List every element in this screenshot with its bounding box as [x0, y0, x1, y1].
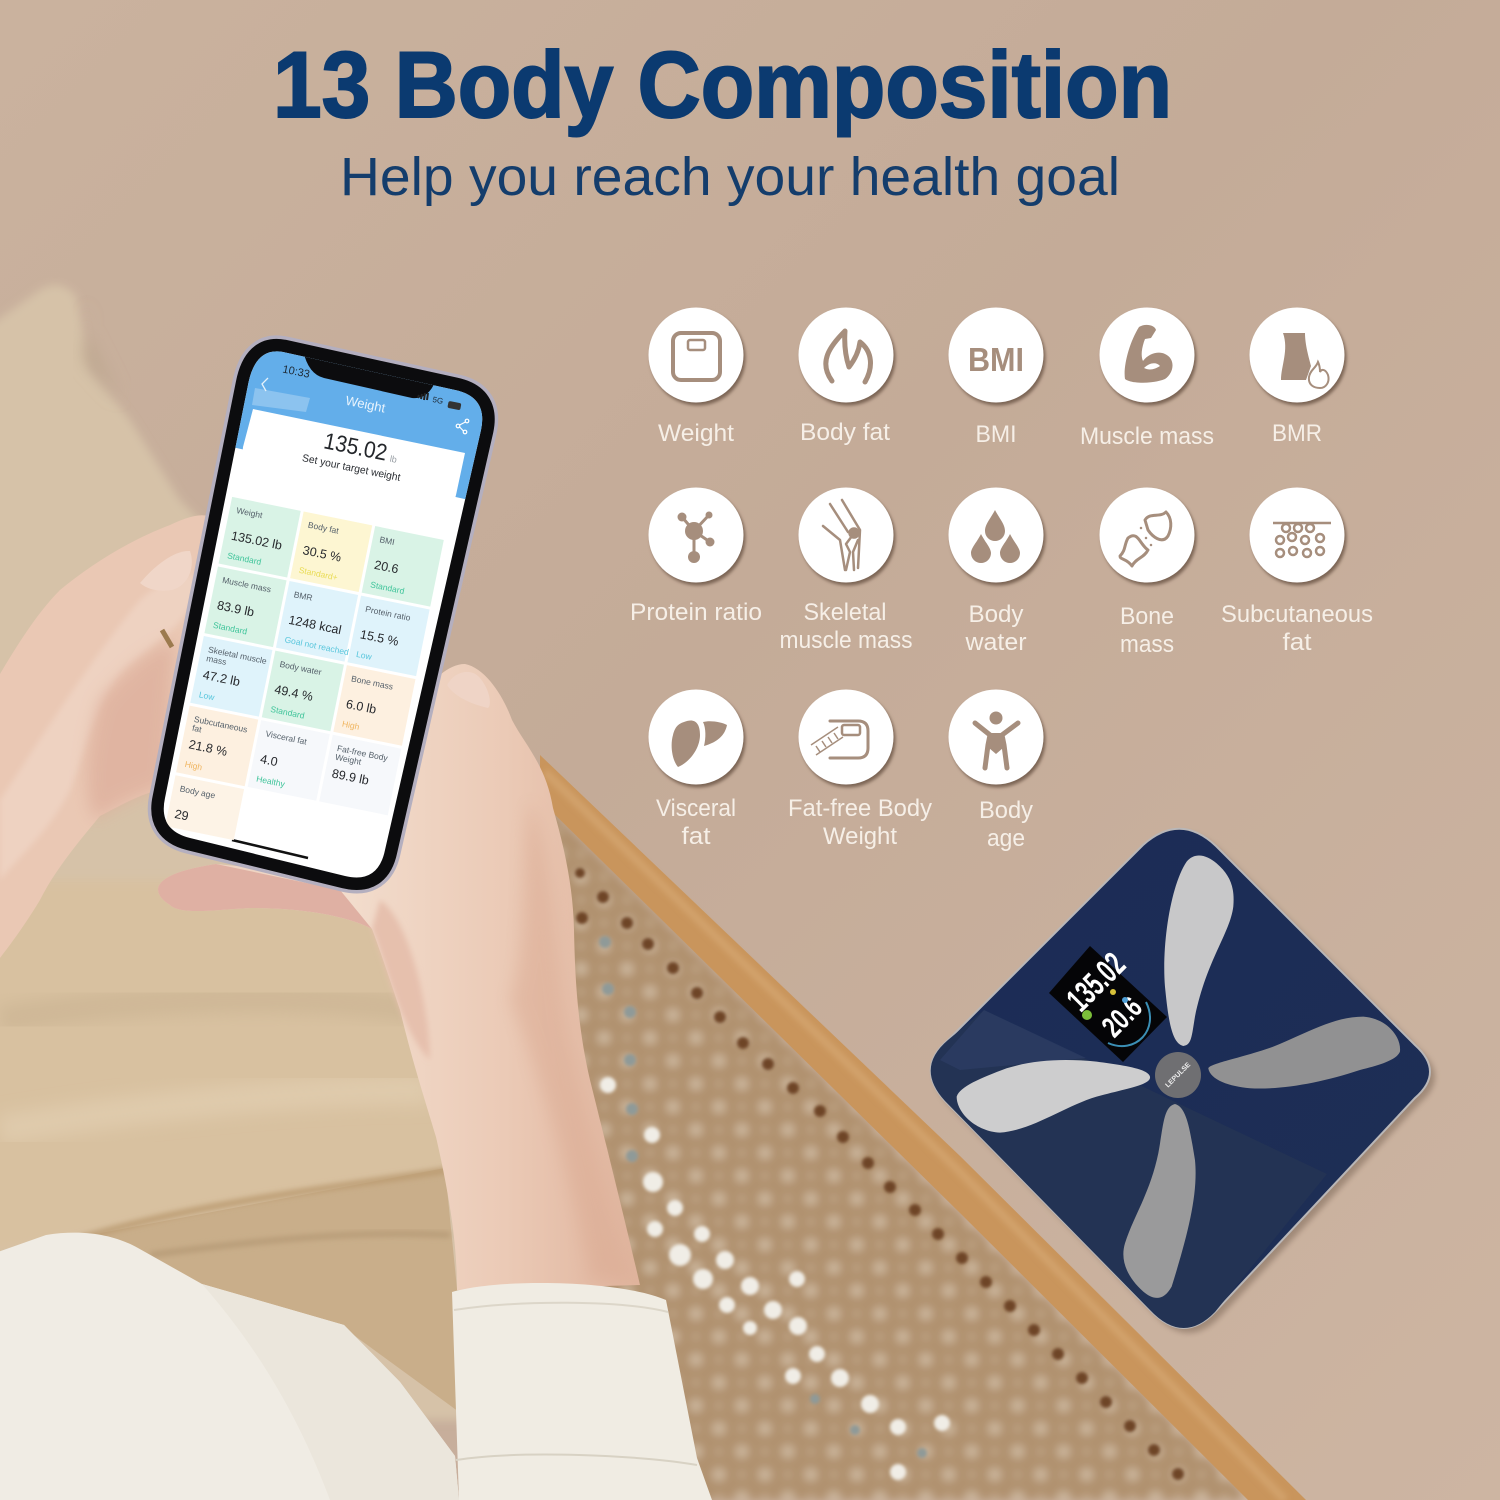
metric cards: Body fat — [307, 520, 340, 536]
label line 2: water — [964, 629, 1027, 656]
metric: Weight — [648, 308, 746, 447]
metric cards: BMI — [379, 534, 395, 547]
metric cards: Protein ratio — [365, 604, 412, 623]
metric cards: Standard — [369, 579, 406, 596]
metric cards: 135.02 — [322, 427, 390, 466]
label: Fat-free Body — [788, 795, 932, 822]
metric cards: 29 — [173, 807, 190, 823]
metric: Body water — [948, 488, 1046, 656]
row 1: Weight — [236, 505, 264, 520]
label: Weight — [658, 420, 734, 447]
icon: fat cells — [1273, 523, 1331, 557]
metric cards: Low — [355, 649, 373, 662]
subtitle: Help you reach your health goal — [340, 147, 1120, 207]
icon: bones — [1120, 512, 1171, 566]
share icon — [456, 419, 469, 434]
label: BMR — [1272, 420, 1322, 447]
signal and battery — [418, 393, 461, 410]
metric cards: Bone mass — [350, 673, 394, 692]
center hub with logo — [1155, 1052, 1201, 1098]
metric cards: Set your target weight — [301, 452, 402, 484]
metric: Subcutaneous fat — [1221, 488, 1373, 656]
metric cards: Visceral fat — [265, 728, 308, 747]
metric cards: Standard — [270, 704, 306, 721]
label: Body fat — [800, 419, 890, 446]
label: Muscle mass — [1080, 423, 1214, 450]
metric cards: Standard — [226, 550, 262, 567]
ring — [162, 630, 172, 647]
icon: liver — [672, 721, 727, 767]
metric cards: Weight — [334, 752, 363, 767]
icon: molecule — [678, 512, 714, 563]
icon: waist and flame — [1281, 333, 1329, 388]
metric cards: Healthy — [255, 774, 286, 789]
smart scale — [931, 829, 1435, 1333]
metric cards: Low — [198, 689, 216, 702]
label line 2: Weight — [823, 823, 897, 850]
rattan chair orange rim — [540, 755, 1306, 1500]
rattan grey holes — [599, 936, 927, 1458]
label: Body — [979, 797, 1033, 824]
metric cards: Standard+ — [298, 565, 339, 582]
metric cards: fat — [191, 723, 203, 735]
metric cards: Standard — [212, 620, 248, 637]
metric cards — [166, 366, 444, 840]
white summary panel — [242, 409, 465, 497]
metric cards: 49.4 % — [273, 682, 314, 704]
left hand — [0, 515, 215, 958]
title: 13 Body Composition — [273, 32, 1172, 137]
metric: Body age — [948, 690, 1046, 852]
label: BMI — [976, 421, 1016, 448]
metric cards: High — [341, 718, 361, 732]
metric: Skeletal muscle mass — [780, 488, 912, 654]
back chevron — [262, 378, 268, 391]
metric cards: 21.8 % — [188, 737, 228, 759]
home indicator — [232, 840, 308, 858]
metric cards: 47.2 lb — [202, 668, 241, 689]
metric cards: BMR — [293, 589, 313, 603]
label: Skeletal — [804, 599, 886, 626]
metric cards: High — [184, 759, 203, 772]
icon: scale with DNA — [811, 721, 868, 758]
row 3: Skeletal muscle — [207, 644, 268, 666]
icon: flexed arm — [1125, 325, 1173, 383]
right hand and forearm — [158, 664, 640, 1290]
metric cards: lb — [389, 454, 398, 465]
row 4: Subcutaneous — [193, 714, 248, 735]
white cuff — [452, 1283, 712, 1500]
metric cards: 83.9 lb — [216, 598, 255, 619]
icon: knee joint — [823, 500, 860, 570]
metric: BMI — [948, 308, 1046, 448]
background: pillow and blanket — [0, 285, 480, 1420]
metric cards: 30.5 % — [302, 543, 342, 565]
scale body — [931, 829, 1430, 1328]
metric: Visceral fat — [648, 690, 746, 850]
top electrode — [1164, 855, 1234, 1046]
rattan dark holes row — [575, 868, 1184, 1480]
label: Body — [968, 601, 1024, 628]
metric: Body fat — [798, 308, 896, 446]
label: Protein ratio — [630, 599, 762, 626]
fingernail — [140, 551, 192, 591]
label line 2: muscle mass — [780, 627, 912, 654]
color display: 135.02 — [1060, 946, 1133, 1019]
icon: flame — [826, 331, 870, 382]
thumbnail — [447, 672, 490, 708]
metric: BMR — [1250, 308, 1346, 447]
metric cards: mass — [205, 653, 227, 667]
label line 2: fat — [682, 823, 711, 850]
icon: scale — [673, 333, 720, 380]
white sleeve — [0, 1233, 459, 1500]
phone body — [164, 351, 482, 878]
metric: Muscle mass — [1080, 308, 1214, 450]
metric cards: 15.5 % — [359, 627, 400, 649]
lighter glass panel — [931, 1010, 1327, 1328]
metric: Protein ratio — [630, 488, 762, 626]
notch — [304, 356, 434, 398]
metric cards: 5G — [432, 395, 444, 406]
metric cards: 10:33 — [281, 364, 311, 381]
metric cards: 20.6 — [373, 558, 400, 576]
row 5: Body age — [179, 783, 216, 800]
header texts: Weight — [344, 393, 387, 416]
phone screen — [164, 351, 482, 878]
left electrode — [957, 1060, 1150, 1133]
metric cards: 89.9 lb — [331, 767, 370, 788]
metric cards: 1248 kcal — [287, 613, 343, 637]
label line 2: age — [987, 825, 1025, 852]
color display — [1049, 946, 1167, 1062]
metric cards: 6.0 lb — [345, 697, 378, 717]
row 2: Muscle mass — [221, 575, 272, 594]
label line 2: mass — [1120, 631, 1174, 658]
label line 2: fat — [1282, 629, 1312, 656]
metric cards: Fat-free Body — [336, 743, 389, 763]
right electrode — [1208, 1017, 1400, 1089]
electrode pads — [957, 855, 1400, 1298]
icon: person — [975, 712, 1018, 768]
label: Visceral — [656, 795, 736, 822]
icon: BMI letters: BMI — [968, 341, 1024, 378]
rattan chair seat — [520, 800, 1250, 1500]
metric: Bone mass — [1100, 488, 1196, 658]
icon: three drops — [971, 510, 1020, 563]
metric cards: Body water — [279, 659, 323, 677]
metric cards: 4.0 — [259, 752, 279, 769]
smartphone — [140, 335, 505, 890]
label: Subcutaneous — [1221, 601, 1373, 628]
label: Bone — [1120, 603, 1174, 630]
app header — [235, 351, 482, 500]
metric: Fat-free Body Weight — [788, 690, 932, 850]
metric cards: Goal not reached — [284, 634, 350, 657]
bottom electrode — [1123, 1104, 1196, 1298]
center hub with logo: LEPULSE — [1164, 1061, 1192, 1089]
rattan bright holes — [600, 1077, 950, 1480]
color display: 20.6 — [1096, 991, 1149, 1044]
scale drop shadow — [936, 834, 1435, 1333]
metric cards: 135.02 lb — [230, 529, 283, 553]
